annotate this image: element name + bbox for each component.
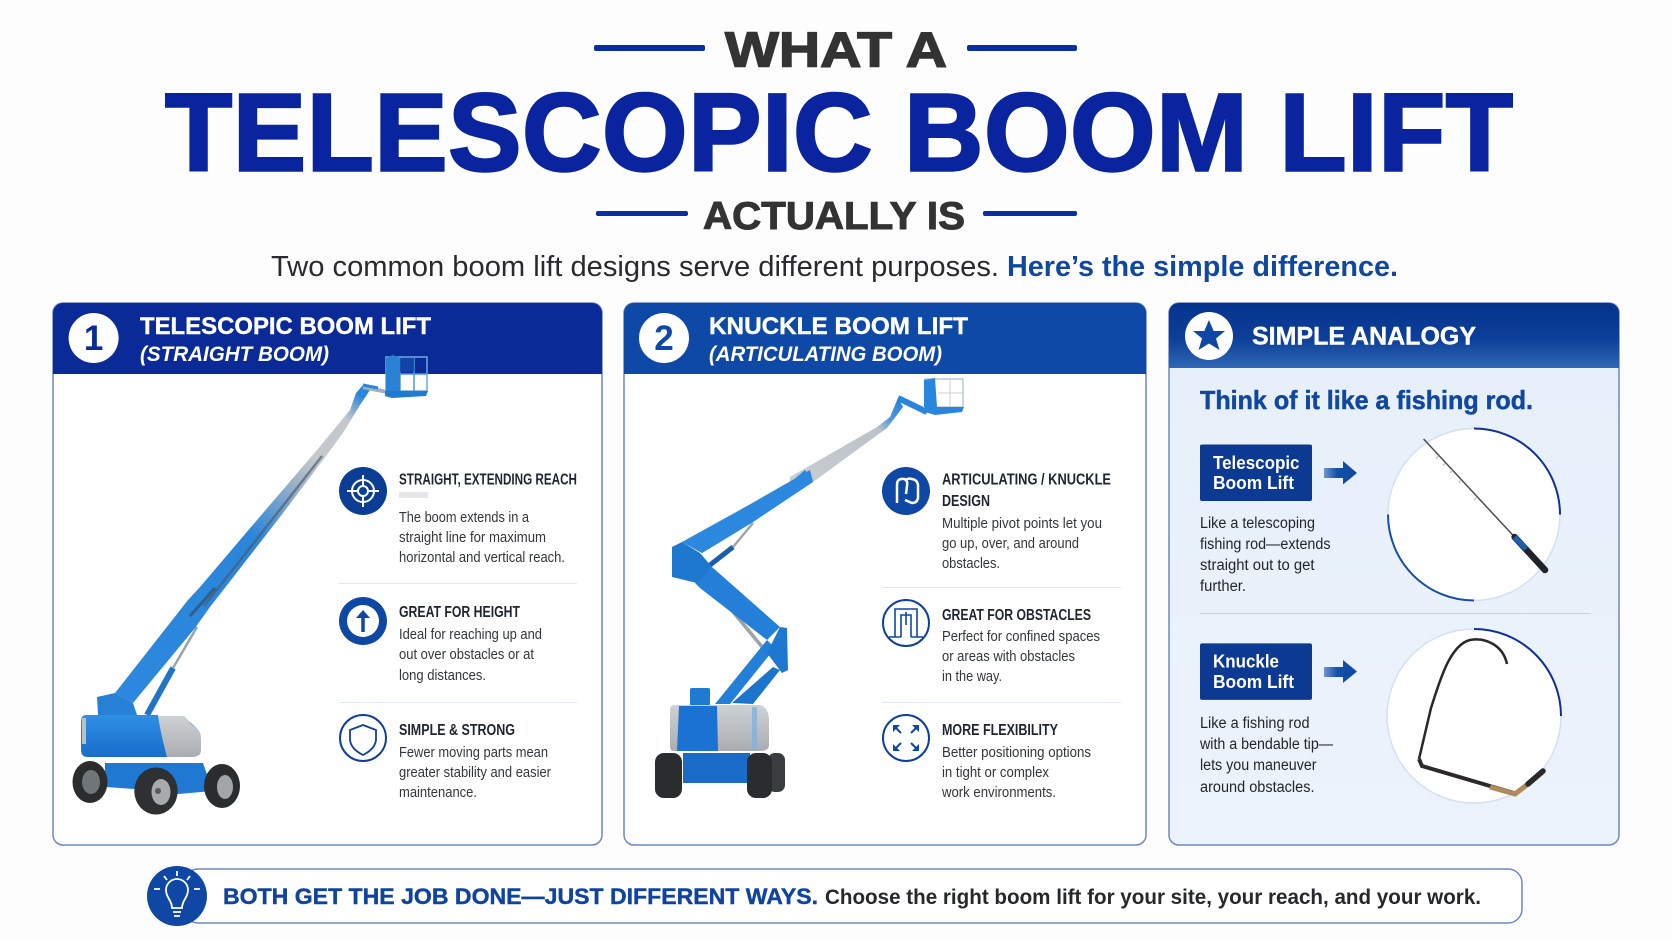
panel 3 header [1169, 303, 1619, 368]
analogy heading: Think of it like a fishing rod. [1200, 385, 1533, 415]
boom [115, 385, 370, 703]
feature: simple and strong: SIMPLE & STRONG [399, 722, 515, 739]
analogy text: lets you maneuver [1200, 757, 1316, 774]
heading line: actually is [596, 195, 1077, 238]
icon: four arrows [883, 715, 929, 761]
feature: straight, extending reach [339, 467, 577, 566]
label box: knuckle boom lift: Boom Lift [1213, 672, 1294, 692]
lift cylinder [147, 627, 197, 715]
subtitle: Two common boom lift designs serve different purposes. [271, 251, 999, 283]
feature: great for obstacles [883, 600, 1100, 685]
panel 2 subheading: (ARTICULATING BOOM) [709, 343, 942, 366]
tower [690, 688, 710, 706]
subtitle [271, 251, 1398, 283]
feature: straight, extending reach: straight line for maximum [399, 530, 546, 546]
lower frame [105, 763, 213, 794]
wheels [72, 761, 240, 814]
icon: up arrow [339, 597, 387, 645]
feature: great for obstacles: Perfect for confined spaces [942, 629, 1100, 645]
feature: more flexibility: MORE FLEXIBILITY [942, 722, 1059, 739]
articulating arms [695, 567, 780, 640]
callout text: BOTH GET THE JOB DONE—JUST DIFFERENT WAYS. [223, 884, 818, 909]
label box: telescopic boom lift: Telescopic [1213, 453, 1300, 473]
arrow [1324, 660, 1357, 683]
label box: telescopic boom lift: Boom Lift [1213, 473, 1294, 493]
callout bar [147, 866, 1522, 926]
panel 1 header [53, 303, 602, 374]
heading line: what a [594, 24, 1077, 78]
number badge 2 [639, 313, 689, 363]
feature: more flexibility: work environments. [941, 785, 1056, 801]
icon: star badge [1185, 312, 1233, 360]
panel: telescopic boom lift [53, 303, 602, 845]
feature: articulating design: Multiple pivot points let you [942, 516, 1102, 532]
feature: more flexibility: Better positioning options [942, 745, 1091, 761]
feature: articulating design [882, 467, 1111, 572]
feature: great for height: long distances. [399, 668, 486, 684]
panel 1 heading: TELESCOPIC BOOM LIFT [140, 313, 431, 340]
feature: straight, extending reach: horizontal and vertical reach. [399, 550, 565, 566]
circle: bent fishing rod [1387, 629, 1561, 803]
turret [97, 693, 137, 715]
circle: straight fishing rod [1388, 428, 1560, 600]
feature: articulating design: ARTICULATING / KNUCKLE [942, 472, 1111, 488]
feature: great for height: Ideal for reaching up and [399, 627, 542, 643]
analogy text: Like a telescoping [1200, 515, 1315, 532]
gray rod [705, 578, 763, 648]
arrow [1324, 461, 1357, 484]
analogy text: fishing rod—extends [1200, 536, 1331, 553]
illustration: knuckle boom lift [655, 378, 964, 798]
feature: simple and strong [340, 715, 551, 801]
label box: knuckle boom lift: Knuckle [1213, 651, 1279, 671]
analogy row: telescopic [1200, 428, 1560, 600]
label box: telescopic boom lift [1200, 444, 1312, 501]
feature: simple and strong: greater stability and easier [399, 765, 551, 781]
subtitle: Here’s the simple difference. [1007, 251, 1398, 283]
callout text: Choose the right boom lift for your site, your reach, and your work. [825, 886, 1481, 909]
feature: more flexibility [883, 715, 1091, 801]
heading line: what a: WHAT A [725, 24, 947, 78]
panel: knuckle boom lift [624, 303, 1146, 845]
feature: articulating design: go up, over, and around [942, 536, 1079, 552]
number badge 2: 2 [654, 319, 674, 358]
number badge 1 [69, 313, 119, 363]
title block [165, 24, 1513, 283]
feature: more flexibility: in tight or complex [942, 765, 1050, 781]
analogy text: further. [1200, 578, 1246, 595]
feature: simple and strong: maintenance. [399, 785, 477, 801]
panel 2 header [624, 303, 1146, 374]
panel 1 subheading: (STRAIGHT BOOM) [140, 343, 329, 366]
panel: simple analogy [1169, 303, 1619, 845]
icon: target [339, 467, 387, 515]
icon: doorway [883, 600, 929, 646]
feature: straight, extending reach: The boom extends in a [399, 510, 530, 526]
analogy text: straight out to get [1200, 557, 1315, 574]
icon: light bulb [147, 866, 207, 926]
feature: great for height: GREAT FOR HEIGHT [399, 604, 520, 621]
analogy text [1200, 515, 1331, 595]
lower frame [683, 753, 750, 783]
cylinder [710, 523, 753, 565]
feature: articulating design: obstacles. [942, 556, 1000, 572]
feature: great for height: out over obstacles or at [399, 647, 534, 663]
heading line: actually is: ACTUALLY IS [703, 195, 965, 238]
illustration: telescopic boom lift [72, 355, 428, 814]
analogy text: Like a fishing rod [1200, 715, 1310, 732]
main title: TELESCOPIC BOOM LIFT [165, 72, 1513, 194]
label box: knuckle boom lift [1200, 643, 1312, 700]
analogy text [1199, 715, 1333, 796]
analogy text: around obstacles. [1200, 779, 1314, 796]
elbow joints [672, 542, 712, 583]
analogy text: with a bendable tip— [1199, 736, 1333, 753]
feature: great for obstacles: GREAT FOR OBSTACLES [942, 607, 1091, 624]
feature: straight, extending reach: STRAIGHT, EXTENDING REACH [399, 472, 577, 488]
upper boom [790, 398, 903, 490]
feature: simple and strong: Fewer moving parts mean [399, 745, 548, 761]
panel 2 heading: KNUCKLE BOOM LIFT [709, 313, 968, 340]
callout text [223, 884, 1481, 909]
chassis body [81, 715, 201, 757]
icon: knuckle arm [882, 467, 930, 515]
feature: articulating design: DESIGN [942, 493, 990, 510]
feature: great for obstacles: or areas with obstacles [942, 649, 1075, 665]
feature: great for obstacles: in the way. [942, 669, 1002, 685]
panel 3 heading: SIMPLE ANALOGY [1252, 322, 1476, 350]
number badge 1: 1 [84, 319, 103, 358]
analogy row: knuckle [1199, 629, 1561, 803]
feature: great for height [339, 597, 542, 684]
tires [655, 753, 785, 798]
icon: shield [340, 715, 386, 761]
chassis body [670, 705, 769, 751]
jib and platform [898, 378, 964, 415]
jib and platform [363, 355, 428, 398]
